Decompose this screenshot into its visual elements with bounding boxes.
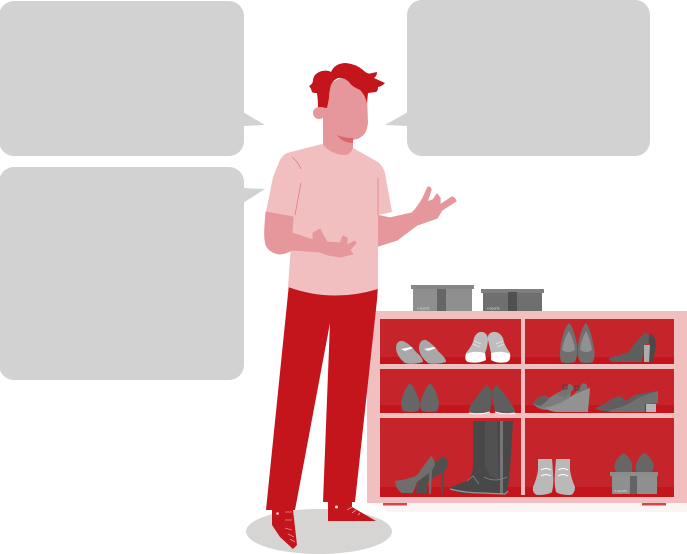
speech bubble: bottom left (0, 167, 265, 380)
person: trousers (266, 284, 378, 510)
shoebox: top left: x-sports (417, 306, 430, 310)
speech bubble: top left (0, 1, 265, 156)
shoes: light loafers (396, 340, 446, 364)
shoebox: top left (411, 285, 474, 311)
person: left arm and hand (265, 212, 356, 257)
shoebox: top right: x-sports (487, 306, 500, 310)
person: right shoe (328, 502, 376, 521)
person (265, 63, 456, 549)
shoe: high heel side view (609, 332, 656, 362)
shoes: grey court heels front view (560, 323, 594, 363)
person: neck and head (313, 77, 368, 157)
shoes: dark flats front view (401, 383, 439, 412)
shoebox with flats (610, 453, 658, 494)
shoe shelf unit (367, 311, 687, 512)
person: right arm and hand (376, 187, 456, 246)
shoes: light ankle booties (533, 459, 575, 495)
shoes: platform stilettos (395, 456, 448, 494)
shoes: wedge sandals (533, 383, 590, 412)
shoebox with flats: x-sports (614, 489, 627, 493)
shoebox: top right (481, 289, 544, 311)
speech bubble: top right (385, 0, 650, 156)
person: t-shirt (266, 144, 392, 296)
person: hair (309, 63, 385, 108)
shoes: dark loafers with white edge (469, 385, 515, 414)
person: left shoe (272, 510, 297, 549)
floor shadow under person (246, 509, 392, 554)
shoes: grey oxfords (595, 391, 658, 412)
boots: tall dark boots (449, 421, 513, 494)
shoes: white sneakers (465, 332, 510, 363)
